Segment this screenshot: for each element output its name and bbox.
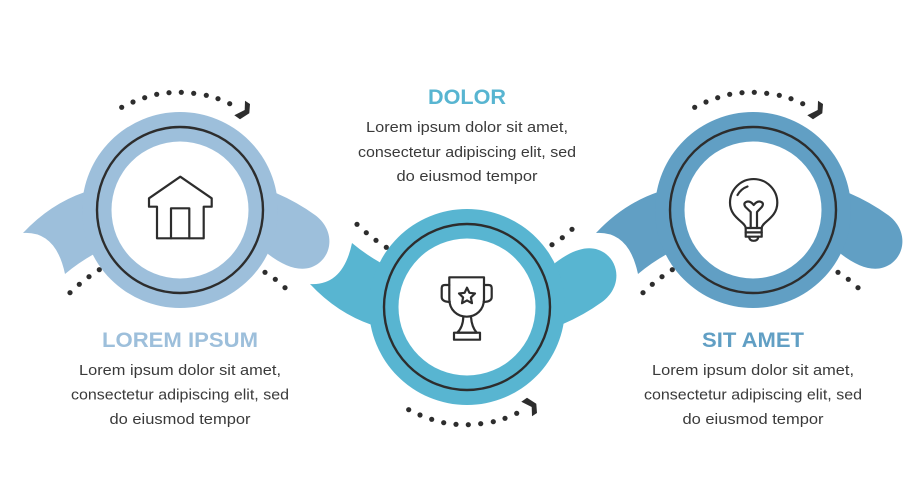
heading: sit amet: SIT AMET <box>702 329 804 352</box>
text block: step 2 description <box>358 119 576 185</box>
panel: step 2 circle with wings <box>310 209 616 427</box>
heading: dolor: DOLOR <box>428 86 506 109</box>
text block: step 3 description <box>644 362 862 428</box>
text block: step 2 description: Lorem ipsum dolor sit amet, <box>366 119 568 136</box>
icon: trophy with star <box>442 277 492 340</box>
icon: light bulb <box>730 179 777 241</box>
text block: step 3 description: Lorem ipsum dolor sit amet, <box>652 362 854 379</box>
text block: step 2 description: consectetur adipiscing elit, sed <box>358 144 576 161</box>
text block: step 1 description: consectetur adipiscing elit, sed <box>71 386 289 404</box>
text block: step 1 description: Lorem ipsum dolor sit amet, <box>79 362 281 379</box>
icon: house <box>149 177 212 238</box>
panel: step 1 circle with wings <box>23 90 329 308</box>
heading: lorem ipsum: LOREM IPSUM <box>102 329 258 352</box>
text block: step 2 description: do eiusmod tempor <box>396 168 538 185</box>
text block: step 3 description: do eiusmod tempor <box>682 411 824 428</box>
text block: step 1 description: do eiusmod tempor <box>110 411 250 428</box>
text block: step 3 description: consectetur adipiscing elit, sed <box>644 386 862 404</box>
text block: step 1 description <box>71 362 289 428</box>
panel: step 3 circle with wings <box>596 90 902 308</box>
